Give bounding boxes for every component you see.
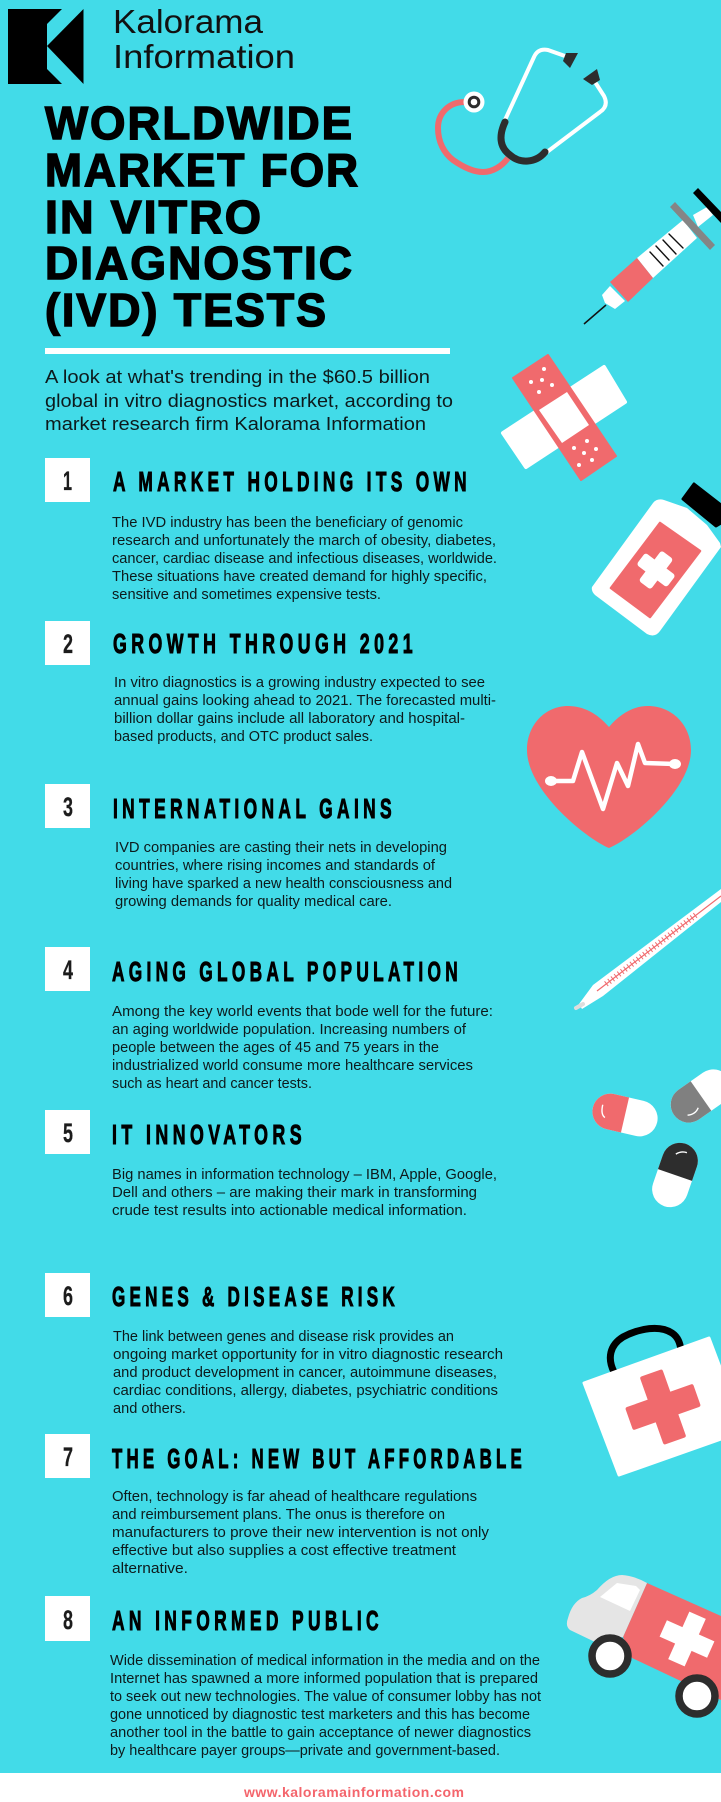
body text 3: growing demands for quality medical care.	[115, 893, 392, 910]
number badge 3	[45, 784, 90, 828]
body text 4	[112, 1003, 493, 1092]
body text 7: Often, technology is far ahead of healthcare regulations	[112, 1488, 477, 1505]
logo wordmark: Information	[113, 38, 295, 75]
number badge 2	[45, 621, 90, 665]
body text 6: cardiac conditions, allergy, diabetes, psychiatric conditions	[113, 1382, 498, 1399]
number badge 8: 8	[63, 1605, 73, 1635]
heading 4: AGING GLOBAL POPULATION	[112, 956, 462, 987]
icon: first aid kit	[584, 1328, 721, 1475]
number badge 7: 7	[63, 1442, 73, 1472]
panel: item 4	[45, 947, 493, 1092]
icon: heart with pulse	[527, 706, 691, 848]
icon: syringe	[584, 188, 721, 324]
footer url: www.kaloramainformation.com	[243, 1784, 464, 1800]
body text 8: gone unnoticed by diagnostic test marketers and this has become	[110, 1706, 530, 1723]
pill: gray	[664, 1062, 721, 1130]
body text 5: Dell and others – are making their mark in transforming	[112, 1184, 477, 1201]
panel: item 6	[45, 1273, 503, 1417]
body text 4: Among the key world events that bode well for the future:	[112, 1003, 493, 1020]
body text 8: to seek out new technologies. The value of consumer lobby has not	[110, 1688, 542, 1705]
number badge 8	[45, 1596, 90, 1641]
pill: black	[647, 1138, 703, 1212]
heading 8: AN INFORMED PUBLIC	[112, 1605, 383, 1636]
body text 3	[115, 839, 452, 910]
heading 5: IT INNOVATORS	[112, 1119, 306, 1150]
icon: stethoscope	[438, 50, 606, 172]
heading 3: INTERNATIONAL GAINS	[113, 793, 396, 824]
body text 2	[114, 674, 496, 745]
intro text: A look at what's trending in the $60.5 billion	[45, 367, 430, 387]
heading 6: GENES & DISEASE RISK	[112, 1281, 399, 1312]
body text 4: an aging worldwide population. Increasing numbers of	[112, 1021, 467, 1038]
body text 5: crude test results into actionable medical information.	[112, 1202, 467, 1219]
body text 6: and product development in cancer, autoimmune diseases,	[113, 1364, 497, 1381]
icon: thermometer	[576, 889, 721, 1009]
title: WORLDWIDE	[45, 97, 354, 149]
body text 8: another tool in the battle to gain acceptance of newer diagnostics	[110, 1724, 531, 1741]
icon: K mark	[8, 9, 84, 84]
body text 3: living have sparked a new health consciousness and	[115, 875, 452, 892]
panel: item 7	[45, 1434, 526, 1577]
number badge 2: 2	[63, 629, 73, 659]
icon: medicine bottle	[592, 484, 721, 635]
body text 4: such as heart and cancer tests.	[112, 1075, 312, 1092]
body text 1: cancer, cardiac disease and infectious diseases, worldwide.	[112, 550, 497, 567]
body text 1: sensitive and sometimes expensive tests.	[112, 586, 381, 603]
icon: ambulance	[567, 1575, 721, 1714]
icon: bandage	[503, 355, 625, 480]
number badge 4	[45, 947, 90, 991]
intro text	[45, 367, 453, 434]
body text 1	[112, 514, 497, 603]
body text 7: and reimbursement plans. The onus is therefore on	[112, 1506, 445, 1523]
body text 7: manufacturers to prove their new intervention is not only	[112, 1524, 489, 1541]
body text 8: Internet has spawned a more informed population that is prepared	[110, 1670, 538, 1687]
icon: pills	[589, 1062, 721, 1212]
logo: Kalorama Information	[8, 3, 295, 84]
body text 7: alternative.	[112, 1560, 188, 1577]
number badge 3: 3	[63, 792, 73, 822]
panel: item 8	[45, 1596, 542, 1759]
body text 3: IVD companies are casting their nets in developing	[115, 839, 447, 856]
intro text: market research firm Kalorama Information	[45, 414, 426, 434]
body text 6	[113, 1328, 503, 1417]
body text 1: research and unfortunately the march of obesity, diabetes,	[112, 532, 496, 549]
body text 2: billion dollar gains include all laboratory and hospital-	[114, 710, 465, 727]
number badge 5	[45, 1110, 90, 1154]
intro text: global in vitro diagnostics market, according to	[45, 391, 453, 411]
body text 8	[110, 1652, 542, 1759]
title	[45, 97, 360, 336]
body text 2: In vitro diagnostics is a growing industry expected to see	[114, 674, 485, 691]
body text 7: effective but also supplies a cost effective treatment	[112, 1542, 457, 1559]
body text 5: Big names in information technology – IBM, Apple, Google,	[112, 1166, 497, 1183]
body text 4: industrialized world consume more healthcare services	[112, 1057, 473, 1074]
body text 6: ongoing market opportunity for in vitro diagnostic research	[113, 1346, 503, 1363]
number badge 7	[45, 1434, 90, 1478]
title: MARKET FOR	[45, 144, 360, 196]
title: (IVD) TESTS	[45, 284, 328, 336]
panel: item 3	[45, 784, 452, 910]
number badge 5: 5	[63, 1118, 73, 1148]
panel: item 2	[45, 621, 496, 745]
number badge 6	[45, 1273, 90, 1317]
body text 2: based products, and OTC product sales.	[114, 728, 373, 745]
number badge 1	[45, 458, 90, 502]
title: IN VITRO	[45, 191, 263, 243]
number badge 6: 6	[63, 1281, 73, 1311]
heading 2: GROWTH THROUGH 2021	[113, 628, 417, 659]
body text 5	[112, 1166, 497, 1219]
body text 8: Wide dissemination of medical information in the media and on the	[110, 1652, 540, 1669]
body text 6: The link between genes and disease risk provides an	[113, 1328, 454, 1345]
body text 2: annual gains looking ahead to 2021. The forecasted multi-	[114, 692, 496, 709]
title: DIAGNOSTIC	[45, 237, 354, 289]
number badge 1: 1	[63, 466, 72, 496]
pill: red	[589, 1090, 661, 1140]
heading 1: A MARKET HOLDING ITS OWN	[113, 466, 471, 497]
body text 8: by healthcare payer groups—private and government-based.	[110, 1742, 500, 1759]
body text 4: people between the ages of 45 and 75 years in the	[112, 1039, 439, 1056]
body text 3: countries, where rising incomes and standards of	[115, 857, 436, 874]
number badge 4: 4	[63, 955, 73, 985]
panel: item 1	[45, 458, 497, 603]
body text 1: The IVD industry has been the beneficiary of genomic	[112, 514, 463, 531]
body text 7	[112, 1488, 489, 1577]
body text 6: and others.	[113, 1400, 186, 1417]
panel: item 5	[45, 1110, 497, 1219]
logo wordmark	[113, 3, 295, 75]
body text 1: These situations have created demand for highly specific,	[112, 568, 487, 585]
logo wordmark: Kalorama	[113, 3, 264, 40]
